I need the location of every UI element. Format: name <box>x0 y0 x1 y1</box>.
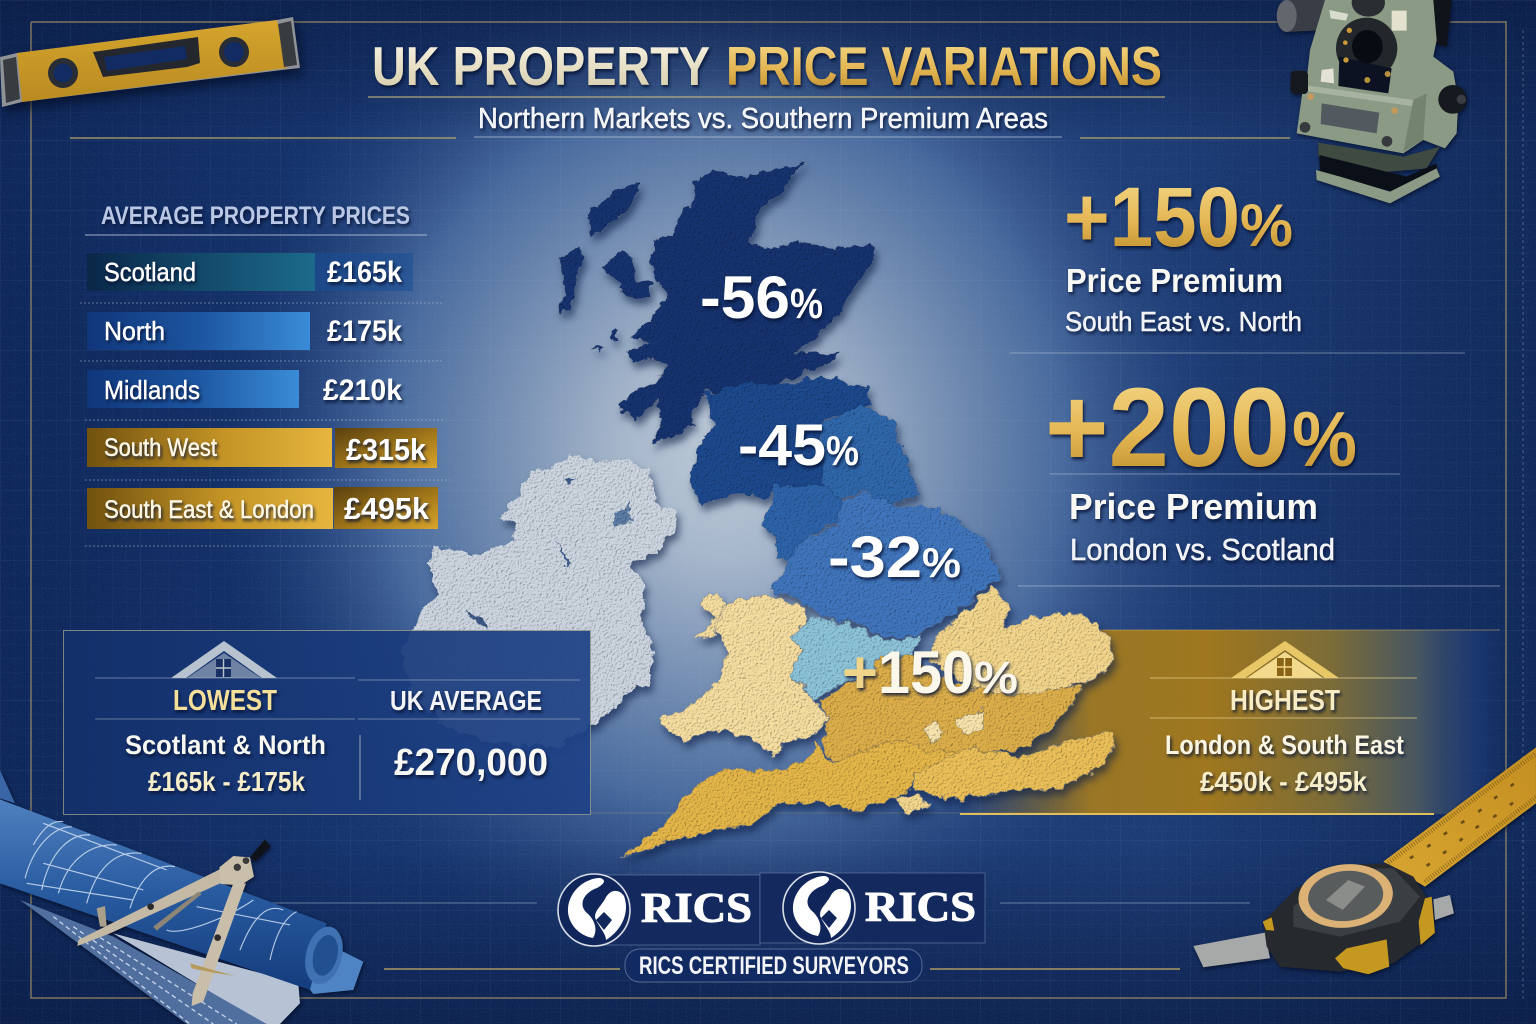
row: South West: South West <box>104 434 217 462</box>
panel: lowest and UK average <box>64 630 590 814</box>
stat: +200% premium: London vs. Scotland <box>1070 532 1335 567</box>
map label: North: % <box>826 427 859 474</box>
focus knobs <box>1291 71 1308 94</box>
row: South East and London <box>87 487 438 529</box>
stat: +200% premium: % <box>1292 395 1357 483</box>
map label: North: -45 <box>738 413 826 478</box>
subtitle underline <box>474 136 1062 138</box>
region: West Midlands <box>790 618 921 700</box>
stat: +150% premium: % <box>1240 192 1293 259</box>
lowest range: £165k - £175k <box>148 766 305 797</box>
tape blade <box>1383 747 1536 887</box>
highest panel background <box>960 630 1505 814</box>
badge: RICS certified surveyors <box>625 949 922 982</box>
map label: South: 150 <box>878 639 974 706</box>
map label: Scotland: -56 <box>700 264 790 331</box>
highest heading: HIGHEST <box>1230 685 1340 717</box>
row: North: £175k <box>327 315 402 348</box>
map label: South: % <box>974 652 1018 703</box>
blueprint lines <box>25 821 297 960</box>
highest region: London & South East <box>1165 730 1404 760</box>
region: North West and Borders <box>691 376 872 505</box>
gold dial <box>1295 860 1396 932</box>
stat: +150% premium: +150 <box>1064 170 1240 264</box>
logo: second RICS <box>760 872 985 944</box>
curled end <box>300 950 363 994</box>
region: London <box>923 710 983 743</box>
body <box>1297 0 1458 153</box>
panel: average property prices <box>80 202 450 546</box>
row: South West: £315k <box>346 432 427 467</box>
stat: +150% premium <box>1010 170 1465 353</box>
end tabs <box>1193 933 1270 967</box>
title <box>372 35 1162 97</box>
panel background <box>64 630 590 814</box>
compass <box>77 839 271 1006</box>
title: PRICE VARIATIONS <box>726 35 1162 97</box>
subtitle: Northern Markets vs. Southern Premium Areas <box>478 103 1048 135</box>
panel heading: AVERAGE PROPERTY PRICES <box>101 202 410 230</box>
eyepiece <box>1287 0 1325 32</box>
tool: total station <box>1277 0 1467 203</box>
title underline <box>368 96 1165 98</box>
icon: gold house <box>1231 641 1339 678</box>
gold bumpers <box>1335 939 1389 974</box>
row: Scotland: £165k <box>327 256 402 289</box>
row: Midlands <box>87 370 402 408</box>
stat: +150% premium: South East vs. North <box>1065 306 1302 337</box>
row: North: North <box>104 316 165 346</box>
stat: +200% premium: +200 <box>1045 365 1290 490</box>
region: Yorkshire and North West <box>762 485 842 560</box>
tool: tape measure <box>1193 747 1536 974</box>
lower sheet <box>113 933 300 1024</box>
region: Midlands <box>771 492 1001 639</box>
tribrach base <box>1318 143 1440 173</box>
region: East Anglia <box>930 586 1113 696</box>
map label: Midlands: % <box>922 539 961 586</box>
map label: Midlands: -32 <box>828 525 922 590</box>
title: UK PROPERTY <box>372 35 710 97</box>
row: Scotland <box>87 253 413 291</box>
row: Scotland: Scotland <box>104 257 196 287</box>
map label: Scotland: % <box>790 280 823 328</box>
row: Midlands: Midlands <box>104 375 200 405</box>
map: Great Britain regions <box>558 164 1116 857</box>
region: Scotland and islands <box>558 164 875 444</box>
logo: first RICS: RICS <box>641 886 752 932</box>
map label: South: + <box>842 639 878 706</box>
stat: +200% premium <box>1018 365 1500 586</box>
tool: spirit level <box>0 17 300 107</box>
region: Isle of Wight <box>895 795 932 814</box>
map: Ireland <box>402 454 677 747</box>
stat: +150% premium: Price Premium <box>1066 262 1283 299</box>
row: South East and London: South East & London <box>104 496 314 524</box>
region: South East <box>911 731 1116 800</box>
panel: highest <box>960 630 1505 814</box>
row: South East and London: £495k <box>344 491 430 526</box>
logo: second RICS: RICS <box>865 885 976 931</box>
RICS logos <box>558 872 985 982</box>
stat: +200% premium: Price Premium <box>1069 486 1318 527</box>
lowest heading: LOWEST <box>173 685 277 717</box>
row: South West <box>87 428 437 468</box>
region: Wales <box>659 593 829 757</box>
case <box>1263 863 1435 972</box>
row: North <box>87 312 402 350</box>
roll <box>0 799 327 990</box>
UK average value: £270,000 <box>394 742 548 784</box>
region: North East <box>820 405 921 506</box>
icon: house <box>171 641 277 678</box>
UK average heading: UK AVERAGE <box>390 685 542 716</box>
row: Midlands: £210k <box>323 374 402 407</box>
region: Central South <box>820 655 1081 762</box>
tool: blueprint rolls and compass <box>0 770 363 1024</box>
logo: first RICS <box>558 874 760 946</box>
badge: RICS certified surveyors: RICS CERTIFIED SURVEYORS <box>639 952 909 980</box>
highest range: £450k - £495k <box>1200 766 1367 797</box>
lowest region: Scotlant & North <box>125 730 326 760</box>
region: South West <box>622 738 966 857</box>
